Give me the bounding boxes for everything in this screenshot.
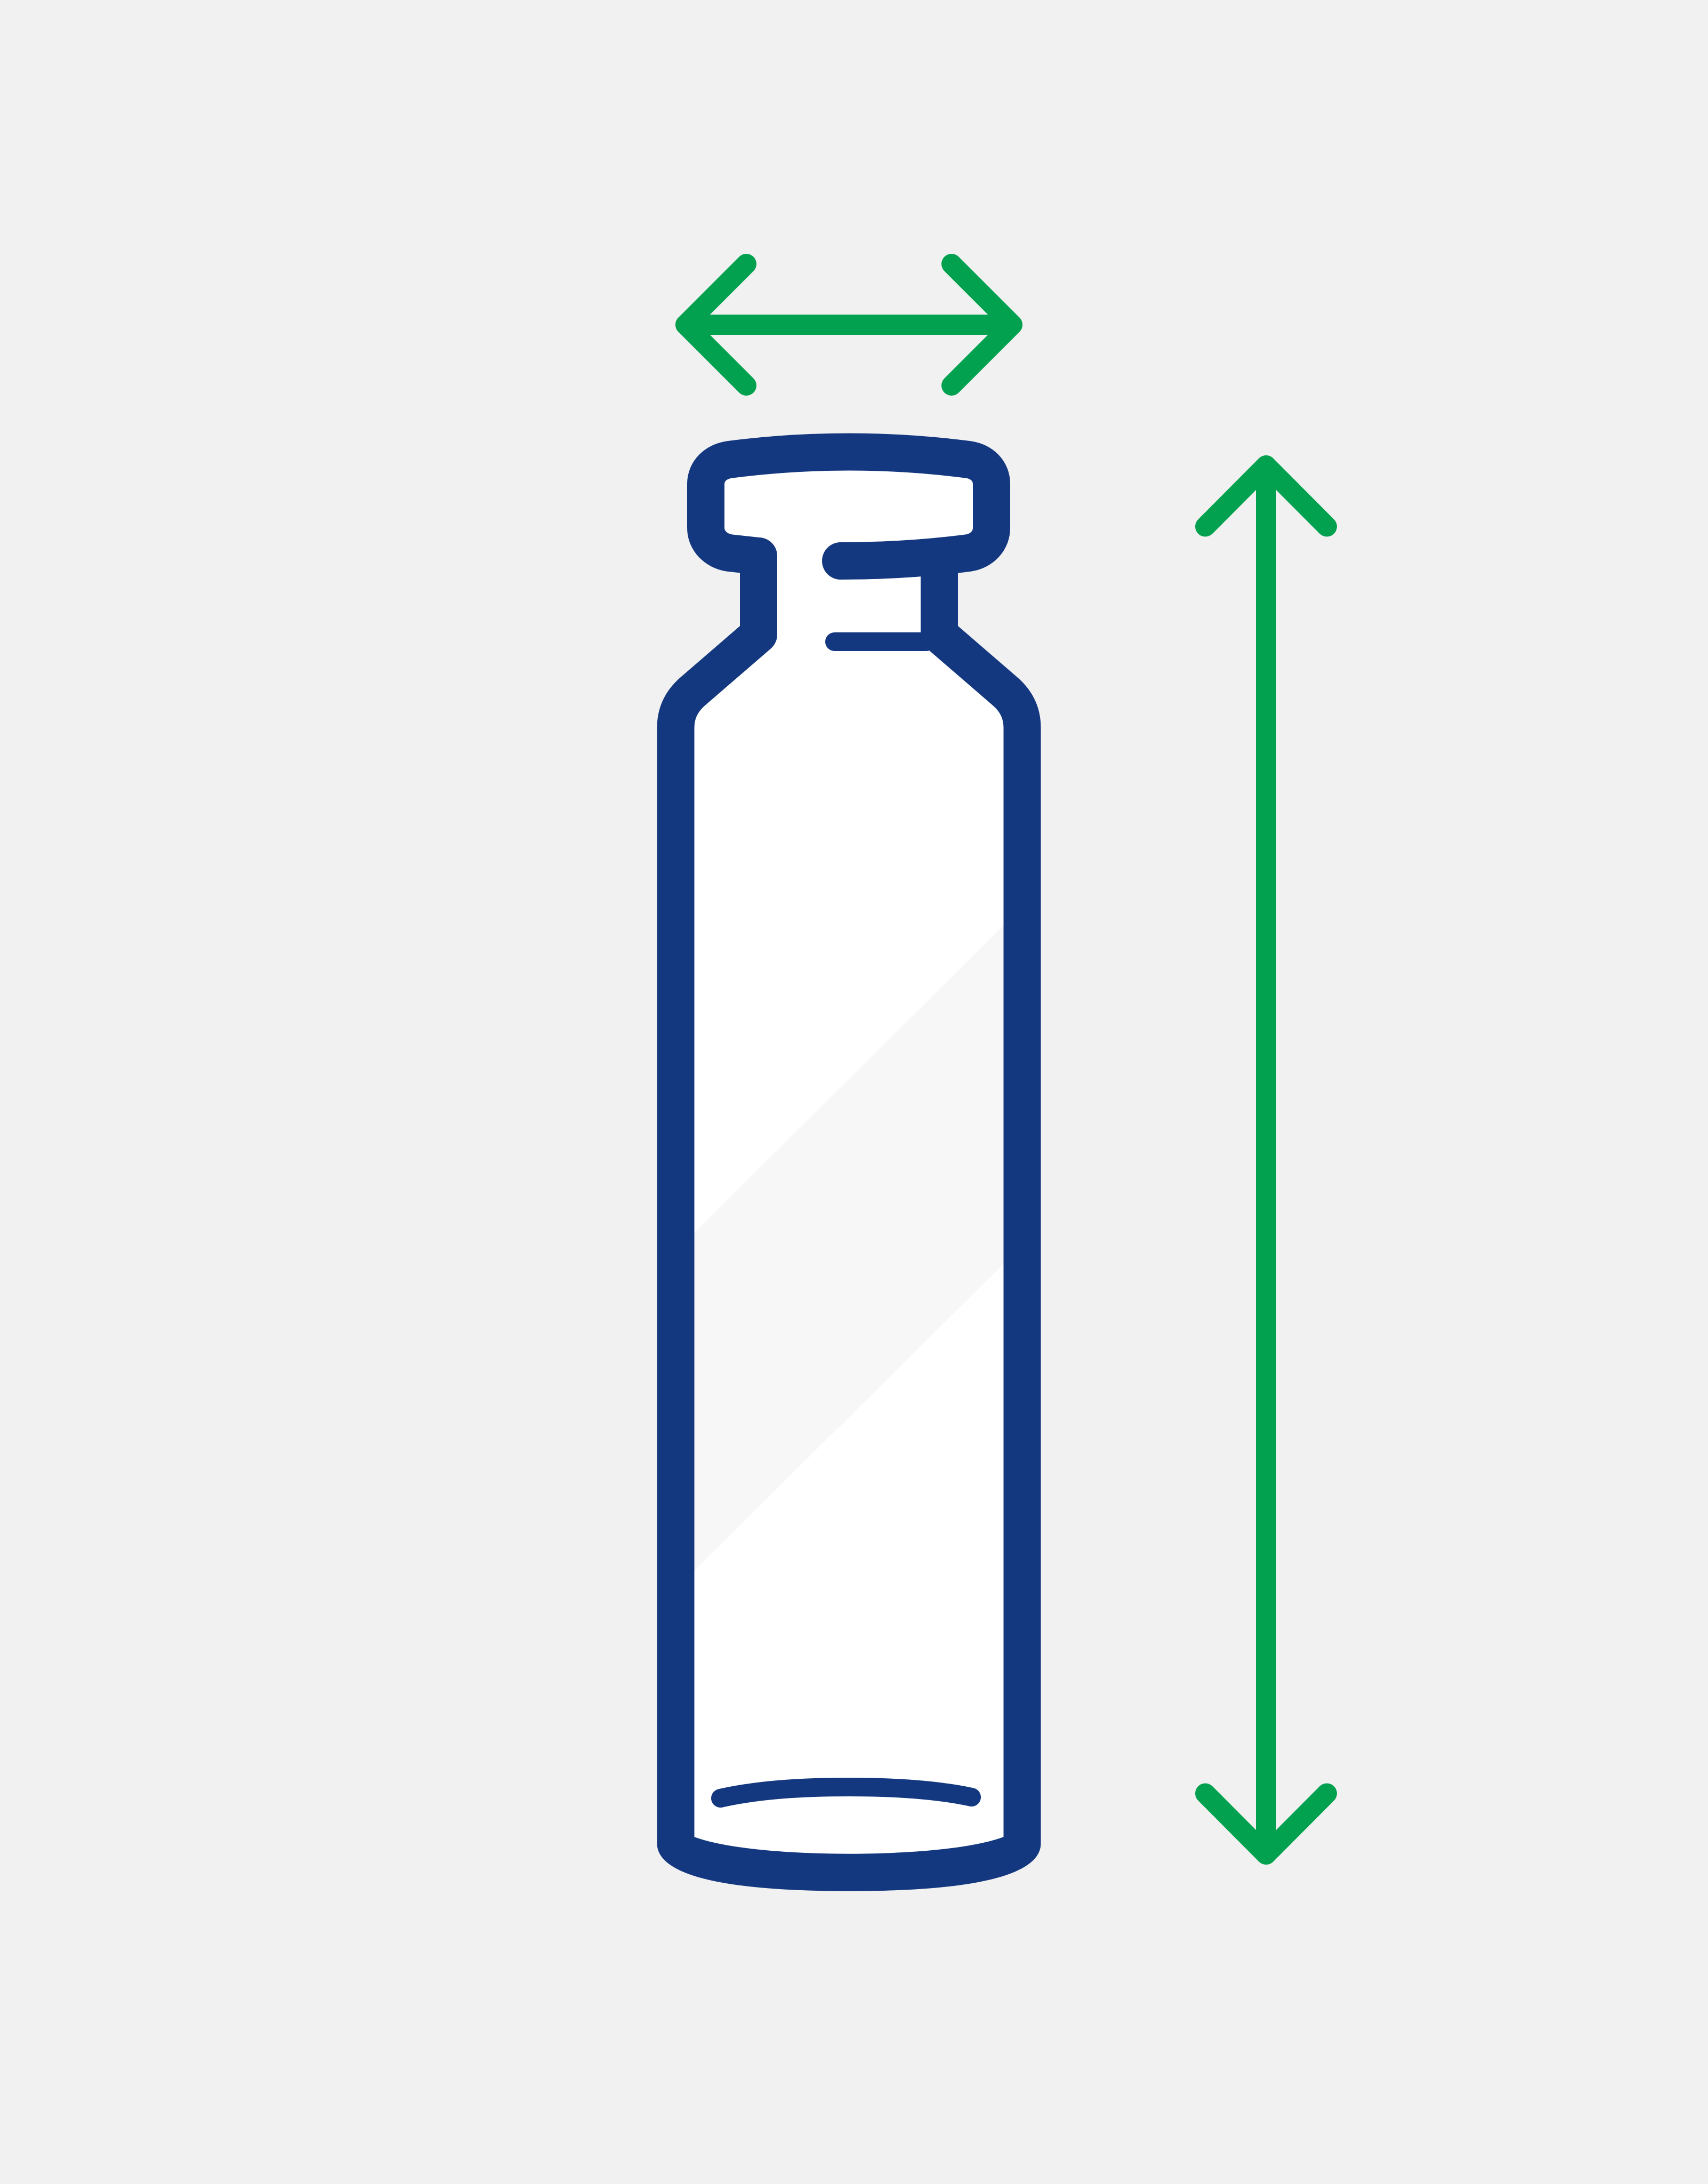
icon: bottle	[657, 452, 1041, 1891]
arrow: bottle height	[1205, 465, 1327, 1854]
diagonal glass reflection band	[694, 925, 1004, 1571]
bottle left wall, shoulder and neck	[676, 556, 759, 1824]
neck collar line	[835, 632, 926, 651]
bottle cap outline	[706, 452, 992, 561]
bottle interior fill	[676, 452, 1022, 1857]
bottle right wall, shoulder and neck	[939, 560, 1022, 1824]
bottle base	[657, 1813, 1041, 1891]
base inner arc	[721, 1787, 971, 1798]
arrow: bottle width	[686, 264, 1012, 386]
